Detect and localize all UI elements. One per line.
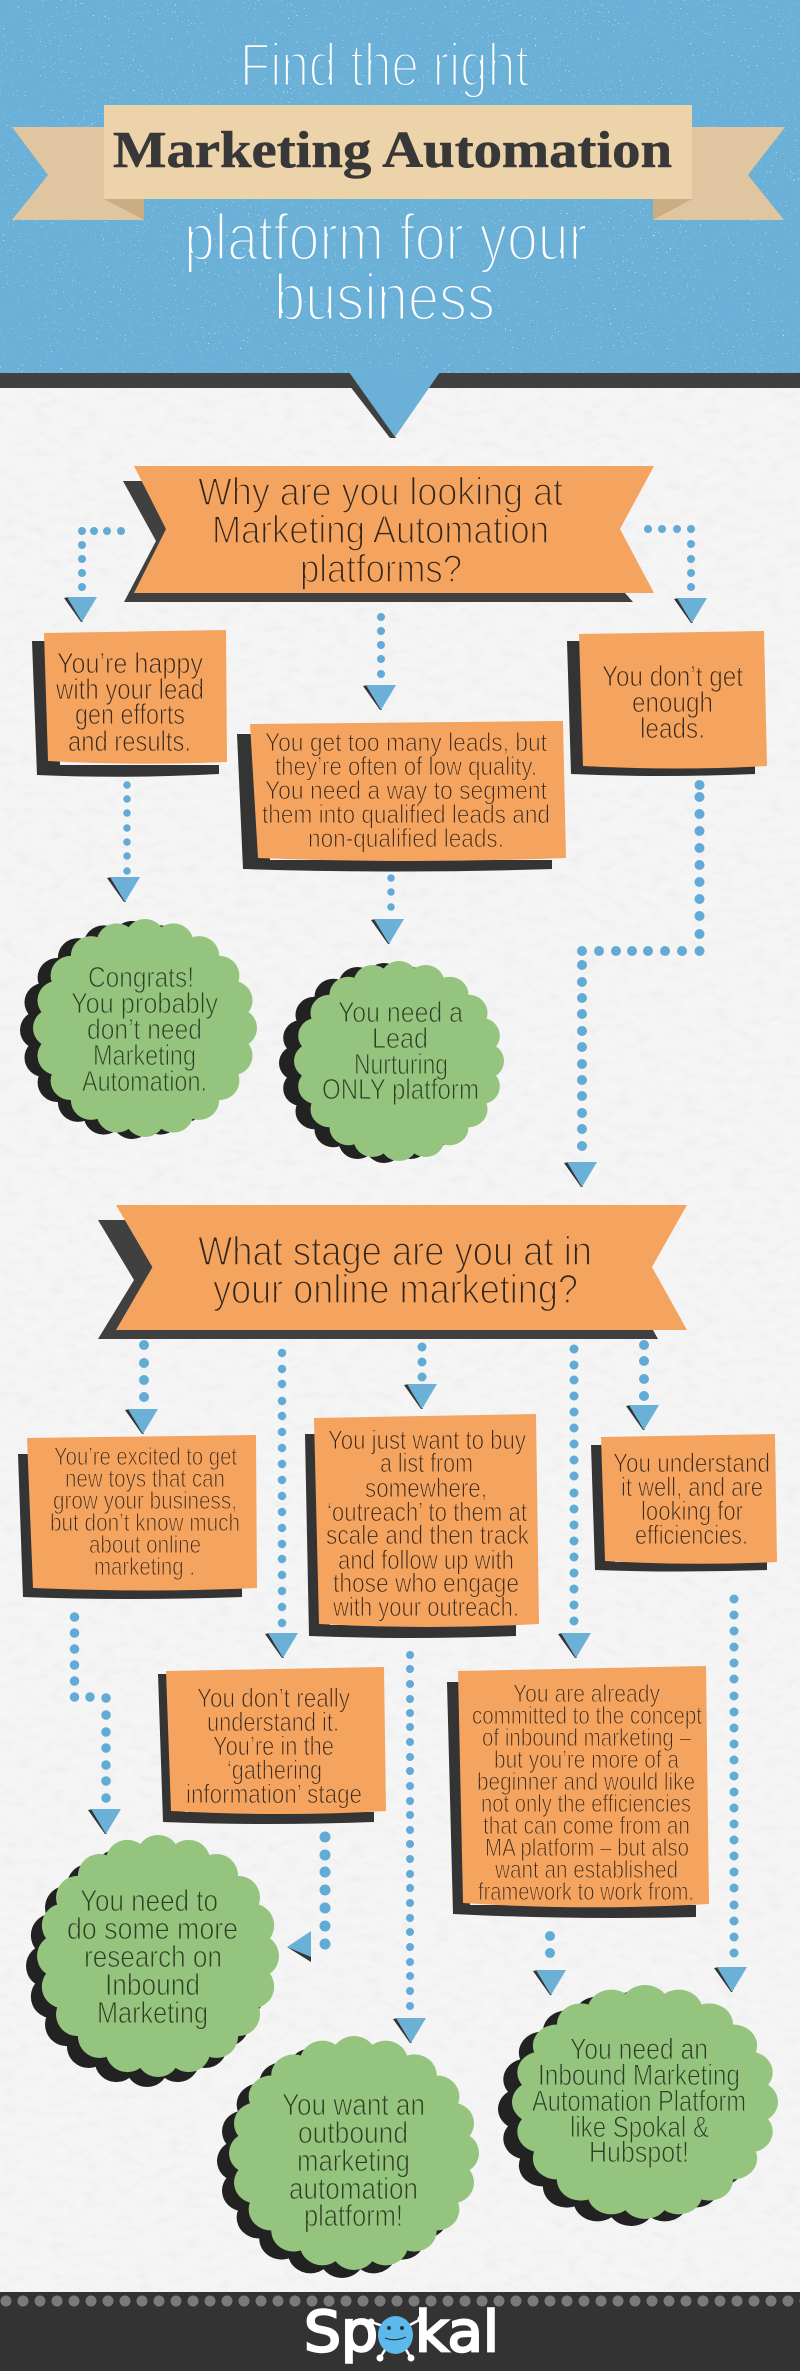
box: buy a list: scale and then track [326,1520,529,1550]
logo: Spokal [304,2300,499,2365]
box: happy with lead gen: You’re happy [57,648,203,680]
box: not enough leads [567,631,767,776]
arrow: stage to gathering information [265,1353,298,1658]
outcome: lead nurturing: Nurturing [354,1049,448,1081]
outcome: congrats [20,919,257,1139]
box: excited about new toys: marketing . [94,1553,195,1581]
outcome: more research: research on [84,1939,222,1974]
question banner: why are you looking: Why are you looking at [198,471,563,514]
box: happy with lead gen: gen efforts [75,699,185,731]
title: platform for your business: platform for your [184,200,587,274]
outcome: outbound platform [217,2036,479,2278]
box: buy a list: somewhere, [365,1473,487,1503]
box: buy a list: You just want to buy [328,1425,526,1455]
outcome: lead nurturing: You need a [338,997,464,1029]
outcome: inbound platform: like Spokal & [570,2111,709,2144]
outcome: congrats: don’t need [87,1014,202,1046]
outcome: inbound platform: Automation Platform [532,2085,746,2118]
box: too many leads: they’re often of low quality. [275,751,537,781]
box: excited about new toys [18,1435,257,1599]
ribbon: Marketing Automation: Marketing Automation [113,122,672,179]
box: buy a list: with your outreach. [332,1592,519,1622]
box: already committed: of inbound marketing – [482,1724,691,1752]
box: not enough leads: leads. [640,713,705,745]
arrow: gathering to more research [287,1837,325,1962]
box: already committed: committed to the concept [472,1702,702,1730]
box: gathering information: You don’t really [197,1683,350,1713]
outcome: outbound platform: marketing [297,2143,410,2178]
box: excited about new toys: but don’t know much [50,1509,240,1537]
box: buy a list: those who engage [333,1568,519,1598]
question banner: why are you looking [123,466,654,602]
box: understand it well: looking for [641,1496,743,1526]
outcome: congrats: Automation. [82,1066,207,1098]
box: already committed: but you’re more of a [494,1746,679,1774]
arrow: not enough leads to second question [564,785,700,1187]
outcome: more research: do some more [67,1911,238,1946]
outcome: more research: You need to [80,1883,218,1918]
box: excited about new toys: You’re excited to get [54,1443,237,1471]
arrow: stage to already committed [558,1349,591,1658]
box: gathering information: information’ stage [186,1779,362,1809]
box: too many leads: You get too many leads, but [265,727,548,757]
box: understand it well [591,1434,777,1572]
box: too many leads: non-qualified leads. [308,823,504,853]
box: already committed: that can come from an [483,1812,690,1840]
box: gathering information: understand it. [207,1707,339,1737]
box: understand it well: You understand [613,1448,770,1478]
title: platform for your business: business [274,260,495,334]
outcome: more research: Marketing [97,1995,208,2030]
arrow: too many leads to lead nurturing [371,878,404,944]
outcome: inbound platform: Hubspot! [589,2136,689,2169]
outcome: outbound platform: You want an [282,2087,425,2122]
box: understand it well: efficiencies. [635,1520,748,1550]
outcome: congrats: Marketing [93,1040,196,1072]
box: buy a list: and follow up with [338,1545,514,1575]
outcome: congrats: You probably [71,988,218,1020]
box: already committed [447,1666,709,1918]
box: not enough leads: enough [632,687,713,719]
box: buy a list: ‘outreach’ to them at [327,1497,527,1527]
arrow: excited to more research [74,1617,121,1834]
outcome: lead nurturing: Lead [372,1023,428,1055]
arrow: understanding to inbound platform [714,1599,747,1992]
box: not enough leads: You don’t get [602,661,743,693]
question banner: why are you looking: Marketing Automation [212,509,549,552]
title: find the right: Find the right [240,31,529,99]
footer [0,2292,800,2371]
outcome: inbound platform: You need an [570,2033,708,2066]
arrow: stage to buy a list [404,1347,437,1409]
box: excited about new toys: new toys that can [65,1465,225,1493]
outcome: more research: Inbound [105,1967,200,2002]
box: gathering information [158,1667,386,1824]
outcome: outbound platform: automation [289,2171,418,2206]
header panel [0,0,800,438]
arrow: question to not enough leads [648,529,707,623]
outcome: more research [26,1835,279,2087]
arrow: question to happy [64,531,121,622]
question banner: what stage: your online marketing? [213,1266,578,1312]
ribbon: Marketing Automation [12,105,785,220]
outcome: congrats: Congrats! [88,962,194,994]
box: too many leads: You need a way to segment [265,775,548,805]
title: platform for your business [184,200,587,334]
box: already committed: not only the efficiencies [481,1790,691,1818]
box: gathering information: ‘gathering [227,1755,322,1785]
box: understand it well: it well, and are [621,1472,763,1502]
outcome: outbound platform: platform! [304,2198,403,2233]
question banner: what stage: What stage are you at in [198,1228,592,1274]
box: too many leads [237,721,566,872]
box: happy with lead gen: and results. [68,726,191,758]
box: already committed: MA platform – but also [485,1834,689,1862]
box: gathering information: You’re in the [213,1731,334,1761]
box: already committed: You are already [513,1680,660,1708]
arrow: happy to congrats [107,785,140,902]
arrow: buy a list to outbound platform [393,1655,426,2043]
box: buy a list [305,1414,539,1638]
box: happy with lead gen [32,630,227,777]
outcome: inbound platform [498,1985,778,2226]
question banner: what stage [98,1205,687,1339]
question banner: why are you looking: platforms? [300,548,462,591]
logo: Spokal: kal [415,2300,499,2365]
box: buy a list: a list from [380,1448,473,1478]
box: already committed: framework to work from. [478,1878,694,1906]
outcome: lead nurturing [279,961,504,1163]
outcome: lead nurturing: ONLY platform [322,1074,479,1106]
logo: Spokal: Sp [304,2300,378,2365]
box: already committed: beginner and would like [477,1768,695,1796]
box: too many leads: them into qualified leads and [262,799,550,829]
arrow: stage to understand well [626,1345,659,1430]
arrow: question to too many leads [363,617,396,710]
box: excited about new toys: grow your business, [53,1487,237,1515]
arrow: stage to excited [125,1345,158,1434]
box: excited about new toys: about online [89,1531,201,1559]
box: already committed: want an established [494,1856,678,1884]
arrow: committed to inbound platform [533,1936,566,1995]
icon: mascot [368,2316,424,2362]
outcome: outbound platform: outbound [298,2115,408,2150]
outcome: inbound platform: Inbound Marketing [538,2059,740,2092]
box: happy with lead gen: with your lead [55,674,204,706]
